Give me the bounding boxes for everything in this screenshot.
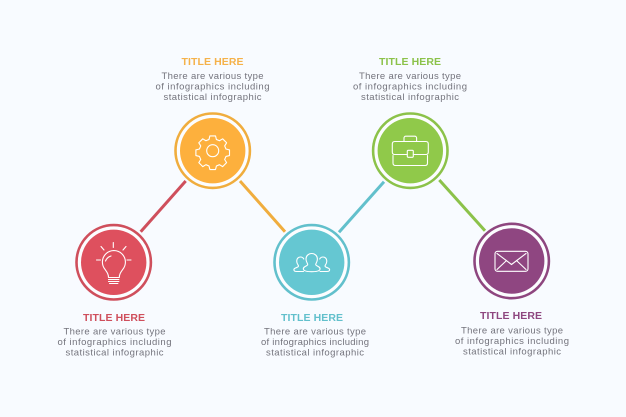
step 5: purple envelope node: [474, 224, 549, 298]
text block: step 5: There are various type: [461, 326, 563, 336]
text block: step 5: statistical infographic: [463, 346, 561, 358]
text block: step 2: [156, 56, 270, 103]
text block: step 4: statistical infographic: [361, 92, 459, 103]
text block: step 1: statistical infographic: [66, 348, 164, 358]
text block: step 4: [353, 56, 467, 103]
text block: step 2: TITLE HERE: [182, 56, 244, 68]
text block: step 3: TITLE HERE: [281, 312, 343, 324]
text block: step 3: [261, 312, 369, 358]
text block: step 5: TITLE HERE: [480, 310, 542, 322]
text block: step 4: of infographics including: [353, 82, 467, 92]
text block: step 1: of infographics including: [58, 337, 172, 348]
text block: step 2: There are various type: [162, 71, 264, 82]
text block: step 4: TITLE HERE: [379, 56, 441, 68]
text block: step 2: of infographics including: [156, 82, 270, 92]
step 3: teal people node: [274, 225, 349, 300]
step 2: gold gear node: [176, 114, 250, 188]
text block: step 3: statistical infographic: [266, 348, 364, 358]
text block: step 3: of infographics including: [261, 337, 369, 348]
text block: step 1: TITLE HERE: [83, 312, 145, 324]
text block: step 5: of infographics including: [455, 336, 569, 347]
icon: light bulb: [96, 242, 131, 284]
connector: teal to green: [339, 182, 384, 232]
text block: step 2: statistical infographic: [164, 92, 262, 103]
connector: gold to teal: [240, 181, 285, 232]
step 4: green briefcase node: [373, 114, 447, 188]
text block: step 3: There are various type: [264, 326, 366, 338]
text block: step 5: [455, 310, 569, 358]
icon: envelope: [495, 251, 528, 271]
connector: green to purple: [439, 180, 485, 231]
icon: gear: [196, 136, 230, 170]
icon: people group: [294, 254, 330, 272]
icon: briefcase: [392, 136, 428, 166]
text block: step 1: [58, 312, 172, 358]
step 1: red bulb node: [76, 225, 151, 300]
text block: step 1: There are various type: [64, 326, 166, 338]
connector: red to gold: [141, 181, 186, 232]
text block: step 4: There are various type: [359, 71, 461, 82]
